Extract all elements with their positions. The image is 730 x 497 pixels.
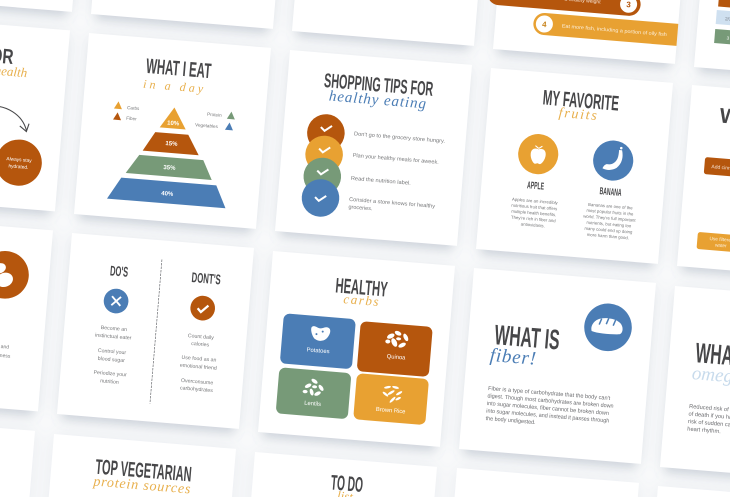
tips text: Plan your healthy meals for aweek. — [352, 153, 439, 166]
pyramid chart: 10% — [167, 120, 180, 128]
panel: healthy carbs — [258, 251, 455, 447]
panel: blank card bottom left — [0, 416, 35, 497]
do's heading: DO'S — [110, 262, 129, 280]
do's list: blood sugar — [97, 356, 125, 364]
panel: eggs card left — [0, 216, 53, 411]
title: WHAT I EAT — [145, 55, 212, 83]
panel: do's and dont's — [57, 233, 254, 429]
panel: blank card top left — [0, 0, 87, 12]
script subtitle: healthy eating — [328, 89, 427, 112]
title: HEALTHY — [335, 274, 389, 302]
tip 4 pill: 4 — [542, 20, 547, 29]
tile: brown rice — [353, 373, 429, 425]
panel: table card top right — [694, 0, 730, 82]
yellow tip box: water — [715, 242, 727, 249]
tip 4 pill: Eat more fish, including a portion of oily fish — [562, 23, 667, 38]
callout circle — [0, 138, 44, 188]
banana label: BANANA — [599, 186, 622, 199]
do's list: nutrition — [100, 378, 119, 386]
do's list: Control your — [98, 348, 127, 356]
panel: to do list — [240, 452, 437, 497]
legend — [113, 101, 236, 130]
do's list: Periodize your — [93, 370, 127, 378]
script subtitle: fiber! — [489, 345, 537, 370]
panel: blank card bottom right — [643, 486, 730, 497]
icon: apple — [517, 132, 560, 176]
apple text: multiple health benefits. — [511, 209, 557, 217]
panel: numbered tips card — [483, 0, 690, 64]
callout circle: hydrated. — [8, 163, 29, 171]
pyramid chart: 35% — [163, 165, 176, 172]
table rows — [714, 0, 730, 48]
panel: favorite fruits — [476, 68, 673, 264]
body text: into sugar molecules, fiber cannot be broken down — [487, 401, 609, 417]
dont's list: Overconsume — [181, 378, 214, 387]
banana text: many could end up doing — [584, 226, 633, 235]
tile: quinoa — [357, 321, 433, 377]
banana text — [582, 202, 638, 241]
banana text: world. They're full important — [583, 214, 637, 223]
icon: banana — [592, 139, 635, 182]
tips text: groceries. — [348, 204, 373, 212]
title: TOP VEGETARIAN — [95, 456, 193, 486]
dont's list: Use food as an — [181, 355, 217, 364]
tile: potatoes — [280, 313, 356, 369]
panel: water tips card right — [677, 85, 730, 281]
tile: lentils — [276, 367, 351, 419]
tip 4 pill — [532, 12, 678, 46]
tile: potatoes: Potatoes — [306, 347, 330, 355]
apple text: They're rich in fiber and — [511, 215, 556, 223]
panel: what I eat — [74, 33, 271, 229]
apple text: Apples are an incredibly — [512, 197, 559, 205]
body text: the body undigested. — [485, 416, 536, 426]
pyramid chart — [107, 103, 233, 208]
do's list: Become an — [100, 325, 127, 333]
script subtitle: fruits — [558, 105, 598, 124]
panel: shopping tips — [275, 50, 472, 246]
tile: lentils: Lentils — [304, 401, 321, 408]
legend: Protein — [207, 112, 222, 118]
body text: into sugar molecules, and instead it passes through — [486, 408, 610, 425]
panel: what is fiber — [459, 268, 656, 464]
pyramid chart: 15% — [165, 141, 178, 148]
arrow — [0, 105, 30, 132]
pyramid chart: 40% — [161, 191, 174, 198]
divider — [150, 260, 162, 404]
legend: Vegetables — [195, 122, 219, 129]
body text — [0, 342, 12, 360]
panel: blank card top center — [292, 0, 489, 46]
body text — [485, 386, 614, 432]
title: SHOPPING TIPS FOR — [323, 70, 434, 101]
apple text: antioxidants. — [521, 221, 545, 228]
yellow tip box — [697, 232, 730, 260]
body text: Fiber is a type of carbohydrate that the body can't — [488, 386, 611, 402]
legend: Fiber — [126, 116, 137, 122]
banana text: Bananas are one of the — [588, 202, 633, 211]
script subtitle: carbs — [343, 291, 379, 309]
script subtitle: in a day — [143, 77, 204, 96]
panel: what is omega — [660, 286, 730, 482]
dont's heading: DONT'S — [191, 269, 221, 287]
dont's list: Count daily — [188, 333, 214, 341]
dont's list — [178, 333, 220, 394]
icon: cross — [103, 288, 129, 314]
panel: blank card top — [91, 0, 288, 29]
apple text: nutritious fruit that offers — [511, 203, 557, 211]
panel: blank card bottom center — [442, 468, 639, 497]
title: MY FAVORITE — [542, 86, 620, 116]
tips text — [348, 131, 446, 218]
title: WHAT IS — [493, 319, 561, 355]
tips text: Consider a store knows for healthy — [349, 197, 436, 210]
body text — [687, 404, 730, 437]
apple label: APPLE — [527, 180, 545, 193]
dont's list: calories — [191, 341, 210, 348]
legend: Carbs — [127, 105, 140, 111]
tile: brown rice: Brown Rice — [376, 407, 406, 415]
tile: quinoa: Quinoa — [386, 354, 406, 362]
banana text: nutrients, but eating too — [586, 220, 632, 229]
do's list — [91, 325, 133, 387]
body text: heart rhythm. — [687, 426, 721, 435]
tips text: Read the nutrition label. — [351, 176, 412, 187]
dont's list: carbohydrates — [180, 385, 213, 394]
apple text — [510, 197, 559, 229]
body text: digest. Though most carbohydrates are broken down — [487, 393, 614, 410]
tip 3 pill — [487, 0, 642, 17]
panel: top vegetarian protein sources — [39, 434, 236, 497]
callout circle: Always stay — [6, 156, 32, 164]
panel: stay hydrated card — [0, 16, 70, 211]
banana text: more harm than good. — [587, 232, 629, 240]
do's list: instinctual eater — [95, 333, 132, 342]
table rows: 3 — [726, 35, 730, 41]
script subtitle: protein sources — [92, 473, 192, 497]
icon: bread — [582, 302, 634, 353]
orange tip box — [704, 157, 730, 186]
banana text: most popular fruits in the — [586, 208, 634, 217]
dont's list: emotional friend — [180, 363, 217, 372]
stacked check circles — [300, 113, 346, 218]
tips text: Don't go to the grocery store hungry. — [354, 131, 446, 145]
icon: eggs — [0, 249, 31, 300]
tip 3 pill: 3 — [626, 0, 632, 9]
icon: check — [189, 295, 216, 321]
